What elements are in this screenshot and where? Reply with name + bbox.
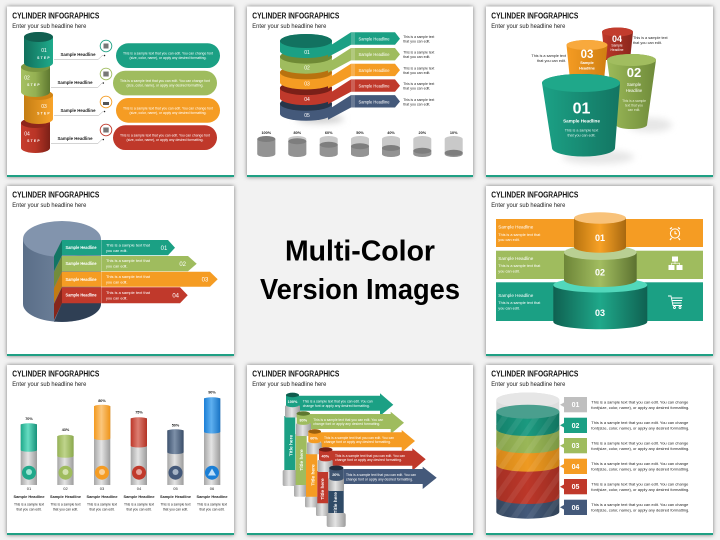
- arrow bands: you can edit.: [106, 280, 128, 284]
- subtitle: Enter your sub headline here: [12, 23, 87, 30]
- tube 06: that you can edit.: [199, 507, 225, 511]
- subtitle: Enter your sub headline here: [12, 202, 87, 209]
- tube 03: This is a sample text: [87, 502, 117, 506]
- subtitle: Enter your sub headline here: [12, 381, 87, 388]
- arrow bands: Sample Headline: [66, 277, 97, 282]
- step cylinders: 04: [24, 132, 30, 138]
- label text: font(size, color, name), or apply any desired formatting.: [591, 426, 689, 430]
- numbered labels: 05: [572, 484, 579, 491]
- tube 02: This is a sample text: [50, 502, 81, 506]
- tube and arrow 2: This is a sample text that you can edit. You can: [313, 418, 383, 422]
- tube 04: that you can edit.: [126, 507, 152, 511]
- pills with text: This is a sample text that you can edit. You can change font: [123, 106, 213, 110]
- tube 06: 90%: [208, 390, 216, 394]
- band text: [498, 224, 541, 310]
- cup 02: text that you: [625, 104, 643, 108]
- center caption: Version Images: [260, 274, 460, 306]
- label text: font(size, color, name), or apply any desired formatting.: [591, 487, 689, 492]
- headlines: Sample Headline: [58, 136, 93, 141]
- tier 03: [553, 278, 647, 329]
- band text: Sample Headline: [498, 256, 534, 261]
- percentage cylinders: 20%: [418, 131, 427, 135]
- tube and arrow 1: 100%: [288, 400, 298, 404]
- step cylinders: STEP: [27, 139, 41, 143]
- cup notes: that you can edit.: [537, 59, 566, 63]
- numbered labels: 02: [572, 423, 579, 430]
- step cylinders: STEP: [37, 112, 51, 116]
- step cylinders: 03: [41, 104, 47, 110]
- tube 02: Sample Headline: [50, 494, 82, 499]
- title: CYLINDER INFOGRAPHICS: [252, 12, 340, 21]
- tube 03: 03: [100, 486, 105, 491]
- band text: This is a sample text that: [498, 301, 541, 305]
- step cylinders: 02: [24, 76, 30, 82]
- numbered labels: 01: [572, 402, 579, 409]
- ribbon headlines: Sample Headline: [358, 36, 390, 42]
- label text: font(size, color, name), or apply any desired formatting.: [591, 405, 689, 410]
- side notes: This is a sample text: [403, 51, 435, 55]
- tube and arrow 2: change font or apply any desired formatting.: [313, 422, 380, 426]
- pills with text: (size, color, name), or apply any desired formatting.: [126, 138, 204, 142]
- band text: you can edit.: [498, 269, 520, 273]
- cup 01: This is a sample text: [565, 128, 598, 132]
- side notes: [403, 35, 435, 106]
- label text: font(size, color, name), or apply any desired formatting.: [591, 508, 689, 512]
- cup notes: This is a sample text: [633, 36, 669, 40]
- subtitle: Enter your sub headline here: [491, 23, 566, 30]
- side notes: This is a sample text: [403, 82, 435, 86]
- colour bands: [496, 219, 703, 321]
- cup 03: Sample: [580, 61, 594, 65]
- label text: This is a sample text that you can edit. You can change: [591, 440, 688, 446]
- title: CYLINDER INFOGRAPHICS: [491, 370, 579, 379]
- cup shadows: [562, 118, 672, 164]
- subtitle: Enter your sub headline here: [252, 23, 327, 30]
- tube 03: 80%: [98, 399, 106, 403]
- layer numbers: 05: [304, 113, 310, 119]
- tube and arrow 3: change font or apply any desired formatting.: [324, 440, 391, 444]
- cup 02: 02: [627, 65, 641, 80]
- tier 02: 02: [595, 268, 605, 278]
- cup 01: that you can edit.: [567, 134, 596, 138]
- arrow bands: you can edit.: [106, 249, 128, 253]
- layer numbers: 01: [304, 50, 310, 56]
- subtitle: Enter your sub headline here: [491, 381, 566, 388]
- tube and arrow 3: This is a sample text that you can edit. You can: [324, 436, 394, 440]
- tube and arrow 4: [316, 447, 426, 516]
- cup 01: [542, 74, 620, 156]
- tube and arrow 3: [305, 429, 415, 507]
- tube and arrow 4: Title here: [320, 478, 326, 500]
- tier 01: 01: [595, 233, 605, 243]
- pills with text: (size, color, name), or apply any desired formatting.: [126, 84, 204, 88]
- panel: staircase tubes with arrows: [247, 365, 473, 535]
- step cylinders: [21, 32, 53, 153]
- arrow bands: This is a sample text that: [106, 244, 151, 248]
- label text: This is a sample text that you can edit. You can change: [591, 482, 688, 486]
- tube 05: that you can edit.: [163, 507, 188, 511]
- tube 04: [124, 410, 155, 511]
- big cylinder: [23, 221, 101, 322]
- arrow bands: This is a sample text that: [106, 275, 151, 279]
- arrow bands: Sample Headline: [66, 261, 97, 266]
- arrow bands: This is a sample text that: [106, 291, 151, 295]
- tube and arrow 5: Title here: [333, 492, 339, 513]
- tube 05: This is a sample text: [160, 502, 191, 506]
- tube 01: 70%: [25, 417, 33, 421]
- ribbon headlines: Sample Headline: [358, 84, 390, 89]
- tube 01: Sample Headline: [14, 494, 45, 499]
- tube 05: 05: [173, 486, 178, 491]
- pills with text: (size, color, name), or apply any desired formatting.: [130, 111, 206, 115]
- tube and arrow 4: change font or apply any desired formatting.: [335, 458, 402, 462]
- tube 04: 75%: [135, 410, 143, 414]
- connector lines: [51, 55, 105, 144]
- numbered labels: 06: [572, 505, 579, 512]
- cup 04: Sample: [611, 44, 623, 48]
- cup notes: This is a sample text: [531, 54, 567, 58]
- tube 06: Sample Headline: [196, 494, 228, 499]
- panel: tiered cake: [486, 186, 713, 356]
- label text: This is a sample text that you can edit. You can change: [591, 420, 688, 425]
- tube 03: [86, 399, 118, 511]
- percentage cylinders: 100%: [261, 131, 272, 135]
- label text: This is a sample text that you can edit. You can change: [591, 461, 688, 466]
- tube 06: 06: [210, 486, 215, 491]
- side notes: This is a sample text: [403, 35, 435, 39]
- label text: font(size, color, name), or apply any desired formatting.: [591, 446, 689, 451]
- title: CYLINDER INFOGRAPHICS: [491, 12, 579, 21]
- numbered labels: 04: [572, 464, 579, 471]
- cup 04: Headline: [610, 48, 624, 52]
- step cylinders: 01: [41, 48, 47, 54]
- band text: This is a sample text that: [498, 264, 541, 268]
- tier 01: [574, 212, 626, 253]
- tube 02: that you can edit.: [53, 507, 78, 511]
- numbered labels: 03: [572, 443, 579, 450]
- tube 02: 02: [63, 486, 68, 491]
- tube 06: [196, 390, 228, 511]
- icon: org chart: [668, 256, 682, 270]
- arrow bands: 02: [179, 262, 187, 268]
- panel: tapered cups: [486, 6, 713, 177]
- tube 01: [14, 417, 45, 511]
- cup 03: 03: [581, 49, 593, 61]
- tube and arrow 5: [327, 466, 437, 527]
- title: CYLINDER INFOGRAPHICS: [12, 190, 100, 199]
- tube 06: This is a sample text: [197, 502, 227, 506]
- tube 03: that you can edit.: [89, 507, 115, 511]
- label text: This is a sample text that you can edit. You can change: [591, 400, 688, 404]
- cup notes: [531, 36, 669, 63]
- center caption: [260, 236, 460, 306]
- arrow bands: Sample Headline: [66, 245, 97, 250]
- subtitle: Enter your sub headline here: [252, 381, 327, 388]
- tube and arrow 1: This is a sample text that you can edit. You can: [303, 400, 373, 404]
- layer numbers: [304, 50, 310, 119]
- layer numbers: 03: [304, 81, 310, 87]
- cup 03: [566, 40, 608, 80]
- percentage cylinders: 50%: [356, 131, 364, 135]
- arrow bands: you can edit.: [106, 264, 128, 268]
- percentage cylinders: 80%: [293, 131, 302, 135]
- tier 03: 03: [595, 308, 605, 318]
- side notes: This is a sample text: [403, 66, 435, 70]
- tube 05: Sample Headline: [160, 494, 192, 499]
- arrow bands: 01: [161, 246, 168, 252]
- title: CYLINDER INFOGRAPHICS: [252, 370, 340, 379]
- side notes: This is a sample text: [403, 98, 435, 102]
- cup 04: 04: [612, 34, 622, 44]
- icon: cart: [668, 296, 682, 308]
- cup 04: [602, 28, 633, 60]
- side notes: that you can edit.: [403, 102, 430, 106]
- layer numbers: 04: [304, 97, 310, 103]
- ribbon headlines: Sample Headline: [358, 99, 390, 104]
- shadow: [296, 115, 344, 123]
- title: CYLINDER INFOGRAPHICS: [12, 12, 100, 21]
- tube 05: [160, 424, 192, 511]
- band text: Sample Headline: [498, 293, 534, 298]
- layer numbers: 02: [304, 66, 310, 72]
- cup 02: can edit.: [628, 108, 640, 112]
- label text: This is a sample text that you can edit. You can change: [591, 502, 688, 507]
- pills with text: This is a sample text that you can edit. You can change font: [120, 134, 210, 138]
- headlines: [58, 52, 96, 141]
- panel: layered disc with ribbons: [247, 6, 473, 177]
- layers and ribbons: [280, 32, 400, 121]
- panel: stacked step cylinders: [7, 6, 234, 177]
- tube and arrow 1: change font or apply any desired formatting.: [303, 404, 370, 408]
- ribbon headlines: [358, 36, 390, 104]
- tier 02: [564, 245, 637, 287]
- title: CYLINDER INFOGRAPHICS: [12, 370, 100, 379]
- tube 03: Sample Headline: [86, 494, 118, 499]
- arrow bands: [54, 240, 218, 320]
- headlines: Sample Headline: [60, 52, 96, 57]
- panel: striped stacked cylinder: [486, 365, 713, 535]
- tube and arrow 2: [294, 411, 404, 497]
- pills with text: [113, 43, 220, 150]
- tube and arrow 5: This is a sample text that you can edit. You can: [346, 473, 416, 477]
- side notes: that you can edit.: [403, 87, 430, 91]
- numbered labels: [560, 397, 587, 515]
- side notes: that you can edit.: [403, 55, 430, 59]
- tube and arrow 1: [283, 393, 393, 486]
- tube 01: This is a sample text: [14, 502, 44, 506]
- cup 02: This is a sample: [622, 99, 646, 103]
- cup notes: that you can edit.: [633, 41, 662, 45]
- subtitle: Enter your sub headline here: [491, 202, 566, 209]
- arrow bands: you can edit.: [106, 296, 128, 300]
- band text: Sample Headline: [498, 224, 534, 230]
- tube 05: 50%: [172, 424, 180, 428]
- tube 02: [50, 428, 82, 511]
- tube 02: 43%: [62, 428, 70, 432]
- tube 01: 01: [27, 486, 32, 491]
- panel: cut cylinder with arrows: [7, 186, 234, 356]
- tube 04: This is a sample text: [124, 502, 154, 506]
- percentage cylinders: 40%: [387, 131, 395, 135]
- striped cylinder: [496, 392, 559, 519]
- tube and arrow 2: Title here: [299, 449, 305, 471]
- tube and arrow 3: Title here: [310, 464, 316, 486]
- band text: you can edit.: [498, 238, 520, 242]
- icon badges: [100, 40, 112, 136]
- side notes: that you can edit.: [403, 40, 430, 44]
- tube and arrow 4: 40%: [321, 455, 330, 459]
- icon: alarm clock: [670, 228, 680, 240]
- cup 02: Headline: [626, 88, 643, 93]
- pills with text: This is a sample text that you can edit. You can change font: [123, 52, 213, 56]
- arrow bands: 03: [202, 278, 209, 284]
- tube 04: 04: [137, 486, 142, 491]
- step cylinders: STEP: [37, 56, 51, 60]
- headlines: Sample Headline: [60, 108, 96, 113]
- cup 03: Headline: [579, 66, 595, 70]
- cup 01: 01: [573, 100, 590, 118]
- cup 02: Sample: [627, 82, 642, 87]
- cup 02: [607, 54, 656, 129]
- label text: [591, 400, 689, 512]
- tube and arrow 4: This is a sample text that you can edit. You can: [335, 454, 405, 458]
- band text: you can edit.: [498, 306, 520, 310]
- cup 01: Sample Headline: [563, 118, 600, 124]
- headlines: Sample Headline: [58, 80, 93, 85]
- tube and arrow 1: Title here: [288, 435, 294, 456]
- tube and arrow 5: 20%: [332, 473, 340, 477]
- pills with text: (size, color, name), or apply any desired formatting.: [130, 56, 206, 60]
- side notes: that you can edit.: [403, 71, 430, 75]
- ribbon headlines: Sample Headline: [358, 52, 390, 57]
- step cylinders: STEP: [27, 83, 41, 87]
- arrow bands: Sample Headline: [66, 292, 97, 298]
- panel: percentage tube chart: [7, 365, 234, 535]
- percentage cylinders: 10%: [450, 131, 458, 135]
- title: CYLINDER INFOGRAPHICS: [491, 190, 579, 199]
- arrow bands: 04: [172, 294, 180, 300]
- tube 04: Sample Headline: [124, 494, 155, 499]
- pills with text: This is a sample text that you can edit. You can change font: [120, 79, 210, 83]
- arrow bands: This is a sample text that: [106, 259, 151, 263]
- ribbon headlines: Sample Headline: [358, 68, 390, 73]
- center caption: Multi-Color: [285, 236, 435, 268]
- label text: font(size, color, name), or apply any desired formatting.: [591, 466, 689, 472]
- tube and arrow 5: change font or apply any desired formatting.: [346, 478, 413, 482]
- tube and arrow 2: 80%: [299, 418, 308, 422]
- percentage cylinders: [257, 131, 463, 157]
- tube and arrow 3: 60%: [310, 436, 318, 440]
- tube 01: that you can edit.: [16, 507, 42, 511]
- percentage cylinders: 60%: [325, 131, 333, 135]
- band text: This is a sample text that: [498, 233, 541, 237]
